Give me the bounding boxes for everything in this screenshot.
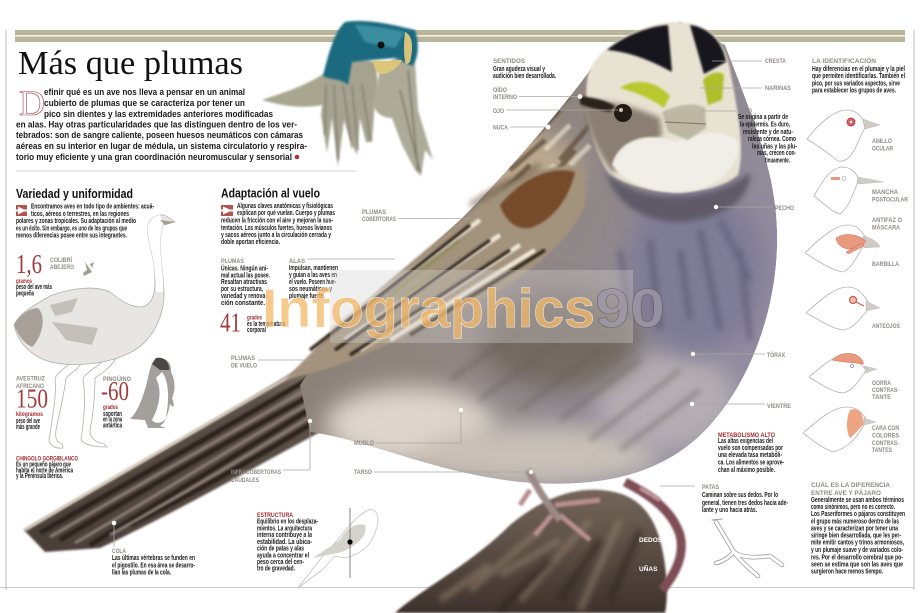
alas note: ALAS <box>289 258 306 265</box>
stat: avestruz: 150 <box>16 384 48 414</box>
stat: avestruz: kilogramos <box>16 411 43 418</box>
stat: avestruz: más grande <box>16 424 40 431</box>
head: anteojos: ANTEOJOS <box>872 323 901 330</box>
estructura note: ESTRUCTURA <box>257 512 293 519</box>
label: vientre <box>690 402 792 410</box>
patas note: lante y uno hacia atrás. <box>702 507 757 514</box>
label: pico: raleza córnea. Como <box>748 136 796 143</box>
body <box>300 22 777 485</box>
label: pecho: PECHO <box>775 205 794 212</box>
text block: reducen la fricción con el aire y mejoran la sus- <box>221 218 333 224</box>
legs and feet <box>520 470 681 590</box>
label: infracobertoras caudales: CAUDALES <box>231 477 260 484</box>
chingolo note <box>16 456 78 480</box>
watermark <box>262 270 665 343</box>
intro text: D <box>19 83 45 123</box>
intro text: en alas. Hay otras particularidades que las distinguen dentro de los ver- <box>16 120 297 130</box>
alas note: el vuelo. Poseen hue- <box>289 279 336 286</box>
label: pico: tinuamente. <box>765 158 790 164</box>
patas note <box>660 484 788 514</box>
metabolismo note: una elevada tasa metabóli- <box>718 452 782 459</box>
head <box>580 22 750 222</box>
label: muslo: MUSLO <box>354 440 374 447</box>
intro text: tebrados: son de sangre caliente, poseen huesos neumáticos con cámaras <box>16 130 303 141</box>
cola note: Las últimas vértebras se funden en <box>112 555 195 562</box>
head: anillo ocular: ANILLO <box>872 138 892 145</box>
label: tarso <box>354 469 533 476</box>
cola note: llan las plumas de la cola. <box>112 570 171 576</box>
head: gorra contrastante: CONTRAS- <box>872 387 899 394</box>
stat: pingüino: soportan <box>103 411 122 418</box>
head: mancha postocular <box>814 167 908 214</box>
rock perch <box>395 490 667 613</box>
icon: flying bird photo <box>262 21 433 176</box>
text block: ticos, aéreos o terrestres, en las regiones <box>31 211 129 218</box>
label: plumas cobertoras: COBERTORAS <box>362 216 396 223</box>
stat: temperatura <box>220 308 285 338</box>
label: plumas cobertoras: PLUMAS <box>362 209 387 216</box>
label: muslo <box>354 408 463 447</box>
icon: bird skeleton balance diagram <box>298 508 378 588</box>
label: tarso: TARSO <box>354 469 372 476</box>
sentidos note: Gran agudeza visual y <box>493 66 545 73</box>
head: gorra contrastante: TANTE <box>872 394 892 401</box>
panel: cuál es la diferencia <box>811 480 905 576</box>
head: mancha postocular: MANCHA <box>872 189 898 196</box>
label: oído interno: OÍDO <box>493 85 507 94</box>
head: anillo ocular: OCULAR <box>872 146 893 152</box>
estructura note: peso cerca del cen- <box>257 559 304 566</box>
alas note: y guían a las aves en <box>289 272 337 279</box>
plumas note: Únicas. Ningún ani- <box>221 264 268 272</box>
label: oído interno <box>493 85 582 101</box>
stat: colibrí: COLIBRÍ <box>50 255 72 264</box>
plumas note: mal actual las posee. <box>221 272 270 280</box>
text block: tentación. Los músculos fuertes, huesos livianos <box>221 225 332 232</box>
stat: colibrí: peso del ave más <box>16 284 52 291</box>
stat: colibrí: gramos <box>16 278 32 285</box>
head: anillo ocular <box>807 110 893 161</box>
icon: hummingbird <box>83 262 94 276</box>
head: antifaz o máscara y barbilla: BARBILLA <box>872 261 899 268</box>
intro text: cubierto de plumas que se caracteriza por tener un <box>44 98 245 109</box>
label: tórax <box>691 350 786 359</box>
title: Más que plumas <box>18 45 243 82</box>
callouts: left labels on bird <box>231 209 663 573</box>
stat: colibrí <box>16 249 74 298</box>
stat: pingüino: -60 <box>101 376 129 406</box>
patas note: Caminan sobre sus dedos. Por lo <box>702 492 778 499</box>
head: antifaz o máscara y barbilla: MÁSCARA <box>872 222 900 232</box>
label: tórax: TÓRAX <box>767 350 786 359</box>
estructura note: mientos. La arquitectura <box>257 526 312 532</box>
label: infracobertoras caudales: INFRACOBERTORAS <box>231 469 282 476</box>
label: pico: resistente y de natu- <box>743 129 793 136</box>
estructura note: tro de gravedad. <box>257 566 295 572</box>
head: cara con colores contrastantes <box>803 407 900 454</box>
text block: menos diferencias posee entre sus integrantes. <box>16 232 127 240</box>
stat: temperatura: es la temperatura <box>247 321 285 328</box>
text block: explican por qué vuelan. Cuerpo y plumas <box>237 210 335 217</box>
head: antifaz o máscara y barbilla: ANTIFAZ O <box>872 217 902 224</box>
icon: red arrow bullet <box>221 205 233 216</box>
metabolismo note: vuelo son compensadas por <box>718 445 783 452</box>
alas note <box>289 258 395 300</box>
panel: cuál es la diferencia: CUÁL ES LA DIFERENCIA <box>811 480 890 489</box>
alas note: Impulsan, mantienen <box>289 265 338 272</box>
metabolismo note: chan al máximo posible. <box>718 467 775 474</box>
panel: cuál es la diferencia: surgieron hace menos tiempo. <box>811 569 883 576</box>
label: pecho <box>714 205 794 212</box>
label: vientre: VIENTRE <box>767 403 792 410</box>
label: pico: Se origina a partir de <box>738 114 788 121</box>
chingolo note: Es un pequeño pájaro que <box>16 462 71 469</box>
stat: pingüino: grados <box>103 404 118 411</box>
label: pico <box>700 108 797 164</box>
heading and text <box>812 56 905 94</box>
head: anteojos <box>806 287 901 330</box>
estructura note: Equilibrio en los desplaza- <box>257 518 318 526</box>
head: mancha postocular: POSTOCULAR <box>872 196 908 204</box>
text block: es un éxito. Sin embargo, es uno de los grupos que <box>16 225 127 232</box>
sentidos note <box>493 58 556 80</box>
metabolismo note: ca. Los alimentos se aprove- <box>718 460 784 466</box>
label: pico: la epidermis. Es duro, <box>740 122 790 128</box>
intro text: aéreas en su interior en lugar de médula, un sistema circulatorio y respira- <box>16 141 307 152</box>
stat: temperatura: grados <box>247 314 262 322</box>
text block: doble aportan eficiencia. <box>221 239 280 246</box>
stat: pingüino <box>101 374 131 430</box>
callouts: right labels on bird <box>690 58 797 410</box>
main bird: white-throated sparrow <box>285 22 777 590</box>
panel: cuál es la diferencia: ENTRE AVE Y PÁJARO <box>811 488 881 497</box>
estructura note: estabilidad. La ubica- <box>257 539 313 546</box>
text block <box>221 203 335 246</box>
patas note: general, tienen tres dedos hacia ade- <box>702 500 788 507</box>
stat: pingüino: en la zona <box>103 416 122 424</box>
plumas note: PLUMAS <box>221 258 245 265</box>
label: oído interno: INTERNO <box>493 94 517 101</box>
alas note: plumaje fuerte. <box>289 293 325 300</box>
sentidos note: SENTIDOS <box>493 58 526 65</box>
label: pico: las uñas y las plu- <box>752 144 797 150</box>
patas note: PATAS <box>702 484 720 491</box>
head: cara con colores contrastantes: CONTRAS- <box>872 440 899 447</box>
cola note: COLA <box>112 548 126 555</box>
icon: ostrich <box>14 215 175 448</box>
label: pico: mas, crecen con- <box>757 150 796 157</box>
label: pico: PICO <box>738 108 752 115</box>
tail of main bird <box>24 345 390 552</box>
intro text: efinir qué es un ave nos lleva a pensar en un animal <box>44 87 245 98</box>
cola note <box>112 521 195 576</box>
label: narinas <box>700 85 792 92</box>
head: cara con colores contrastantes: TANTES <box>872 447 893 454</box>
label: cresta <box>712 58 786 65</box>
stat: pingüino: PINGÜINO <box>103 374 131 383</box>
plumas note <box>221 258 270 307</box>
callouts: head labels left <box>493 85 618 132</box>
metabolismo note: METABOLISMO ALTO <box>718 432 775 439</box>
heading: Variedad y uniformidad <box>16 186 133 201</box>
head: antifaz o máscara y barbilla <box>805 217 902 272</box>
text block: Encontramos aves en todo tipo de ambientes: acuá- <box>31 204 154 210</box>
text block: polares y zonas tropicales. Su adaptación al medio <box>16 218 136 225</box>
intro text: torio muy eficiente y una gran coordinación neuromuscular y sensorial <box>16 152 292 163</box>
panel: adaptación al vuelo <box>220 186 395 338</box>
stat: colibrí: ABEJERO <box>50 264 74 271</box>
stat: avestruz: peso del ave <box>16 418 40 425</box>
label: plumas de vuelo: DE VUELO <box>231 362 257 370</box>
label: plumas cobertoras <box>362 209 470 223</box>
metabolismo note <box>718 432 784 474</box>
sentidos note: audición bien desarrollada. <box>493 73 556 80</box>
wing <box>285 165 585 380</box>
plumas note: por su estructura, <box>221 286 263 293</box>
heading and text: LA IDENTIFICACIÓN <box>812 56 876 65</box>
plumas note: Resaltan atractivas <box>221 279 267 286</box>
plumas note: variedad y renova- <box>221 293 267 300</box>
alas note: sos neumáticos y <box>289 286 332 293</box>
watermark: 90 <box>595 277 665 339</box>
label: infracobertoras caudales <box>231 419 312 484</box>
stat: colibrí: pequeña <box>16 290 34 298</box>
label: uñas: UÑAS <box>639 564 658 573</box>
label: ojo: OJO <box>493 108 504 115</box>
estructura note: interna contribuye a la <box>257 532 312 539</box>
stat: pingüino: antártica <box>103 422 122 430</box>
heading: Adaptación al vuelo <box>221 186 320 200</box>
panel: la identificación <box>803 56 908 454</box>
text block: y sacos aéreos junto a la circulación cerrada y <box>221 232 331 239</box>
cola note: el pigostilo. En esa área se desarro- <box>112 562 195 570</box>
watermark: Infographics <box>262 277 595 339</box>
estructura note <box>257 512 318 572</box>
panel: variedad y uniformidad <box>14 186 175 480</box>
label: plumas de vuelo: PLUMAS <box>231 355 256 362</box>
chingolo note: habita el norte de América <box>16 468 73 474</box>
head: cara con colores contrastantes: CARA CON <box>872 425 899 432</box>
intro text <box>16 83 307 163</box>
stat: temperatura: corporal <box>247 327 266 334</box>
head: gorra contrastante: GORRA <box>872 380 891 387</box>
intro text: pico sin dientes y las extremidades anteriores modificadas <box>44 109 273 120</box>
stat: avestruz <box>16 376 48 431</box>
label: nuca: NUCA <box>493 124 508 132</box>
label: cresta: CRESTA <box>765 58 786 65</box>
chingolo note: y la Península Ibérica. <box>16 473 63 480</box>
icon: red arrow bullet <box>16 205 27 216</box>
label: narinas: NARINAS <box>765 85 792 92</box>
metabolismo note: Las altas exigencias del <box>718 438 773 445</box>
stat: avestruz: AFRICANO <box>16 383 44 390</box>
stat: avestruz: AVESTRUZ <box>16 376 45 382</box>
chingolo note: CHINGOLO GORGIBLANCO <box>16 456 78 462</box>
stat: temperatura: 41 <box>220 308 241 338</box>
text block: Algunas claves anatómicas y fisiológicas <box>237 203 333 210</box>
head: gorra contrastante <box>809 353 899 401</box>
icon: bird foot <box>712 519 782 576</box>
label: dedos: DEDOS <box>639 537 663 544</box>
estructura note: ción de patas y alas <box>257 546 304 552</box>
icon: penguin <box>130 358 174 428</box>
stat: colibrí: 1,6 <box>16 249 42 279</box>
head: cara con colores contrastantes: COLORES <box>872 432 900 440</box>
estructura note: ayuda a concentrar el <box>257 552 309 560</box>
text block <box>16 204 154 240</box>
plumas note: ción constante. <box>221 300 265 307</box>
label: plumas de vuelo <box>231 355 312 370</box>
